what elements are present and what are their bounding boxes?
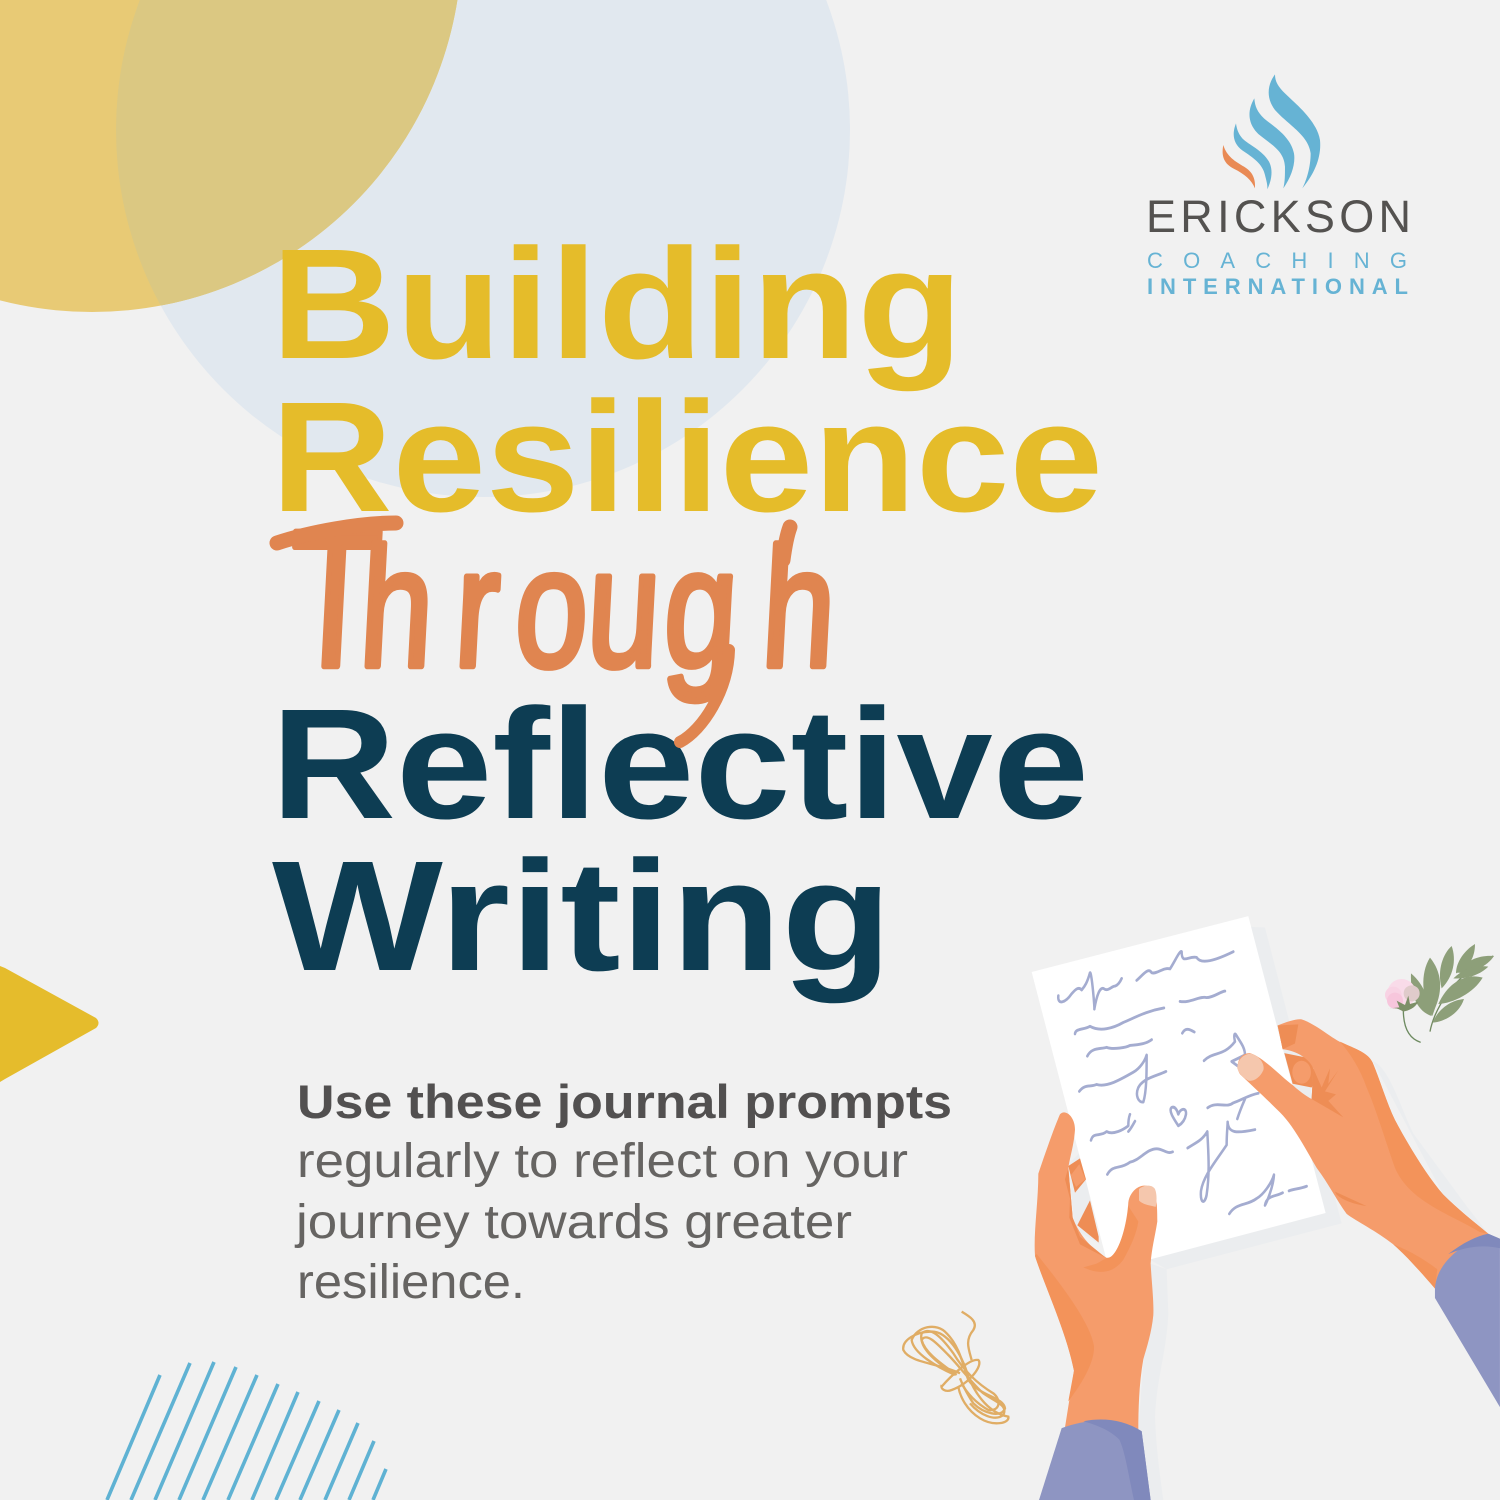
background circles xyxy=(0,0,850,497)
title script word: Through xyxy=(277,489,842,742)
icon: string coil xyxy=(903,1312,1008,1423)
logo flame icon xyxy=(1223,74,1320,189)
left cuff xyxy=(1039,1420,1151,1500)
title line: Reflective: Reflective xyxy=(271,677,1089,852)
title line: Resilience: Resilience xyxy=(271,370,1103,545)
illustration: hands holding letter xyxy=(1032,916,1500,1500)
right cuff xyxy=(1435,1234,1500,1407)
intro bold line: Use these journal prompts xyxy=(297,1075,952,1128)
intro text xyxy=(294,1075,952,1309)
title script word: Through: T xyxy=(283,489,386,707)
intro line 2: regularly to reflect on your xyxy=(297,1135,908,1188)
intro line 4: resilience. xyxy=(297,1256,525,1309)
title line: Building: Building xyxy=(271,217,963,392)
icon: yellow triangle xyxy=(0,966,98,1082)
logo subline: international: INTERNATIONAL xyxy=(1147,274,1408,299)
left hand xyxy=(1035,1112,1157,1432)
paper and arm shadows xyxy=(1068,927,1488,1500)
intro line 3: journey towards greater xyxy=(294,1196,852,1249)
logo wordmark: ERICKSON xyxy=(1146,191,1411,242)
logo subline: coaching: COACHING xyxy=(1147,248,1407,273)
striped half circle xyxy=(107,1362,386,1500)
icon: flower and leaves xyxy=(1385,944,1494,1042)
title script word: Through: hrough xyxy=(356,513,840,702)
handwriting xyxy=(1058,951,1307,1214)
left thumb nail xyxy=(1139,1186,1157,1207)
right hand xyxy=(1237,1019,1488,1288)
right thumb nail xyxy=(1237,1054,1264,1081)
title line: Writing: Writing xyxy=(272,829,892,1004)
paper xyxy=(1032,916,1326,1259)
title xyxy=(271,217,1103,1004)
logo xyxy=(1146,74,1411,299)
